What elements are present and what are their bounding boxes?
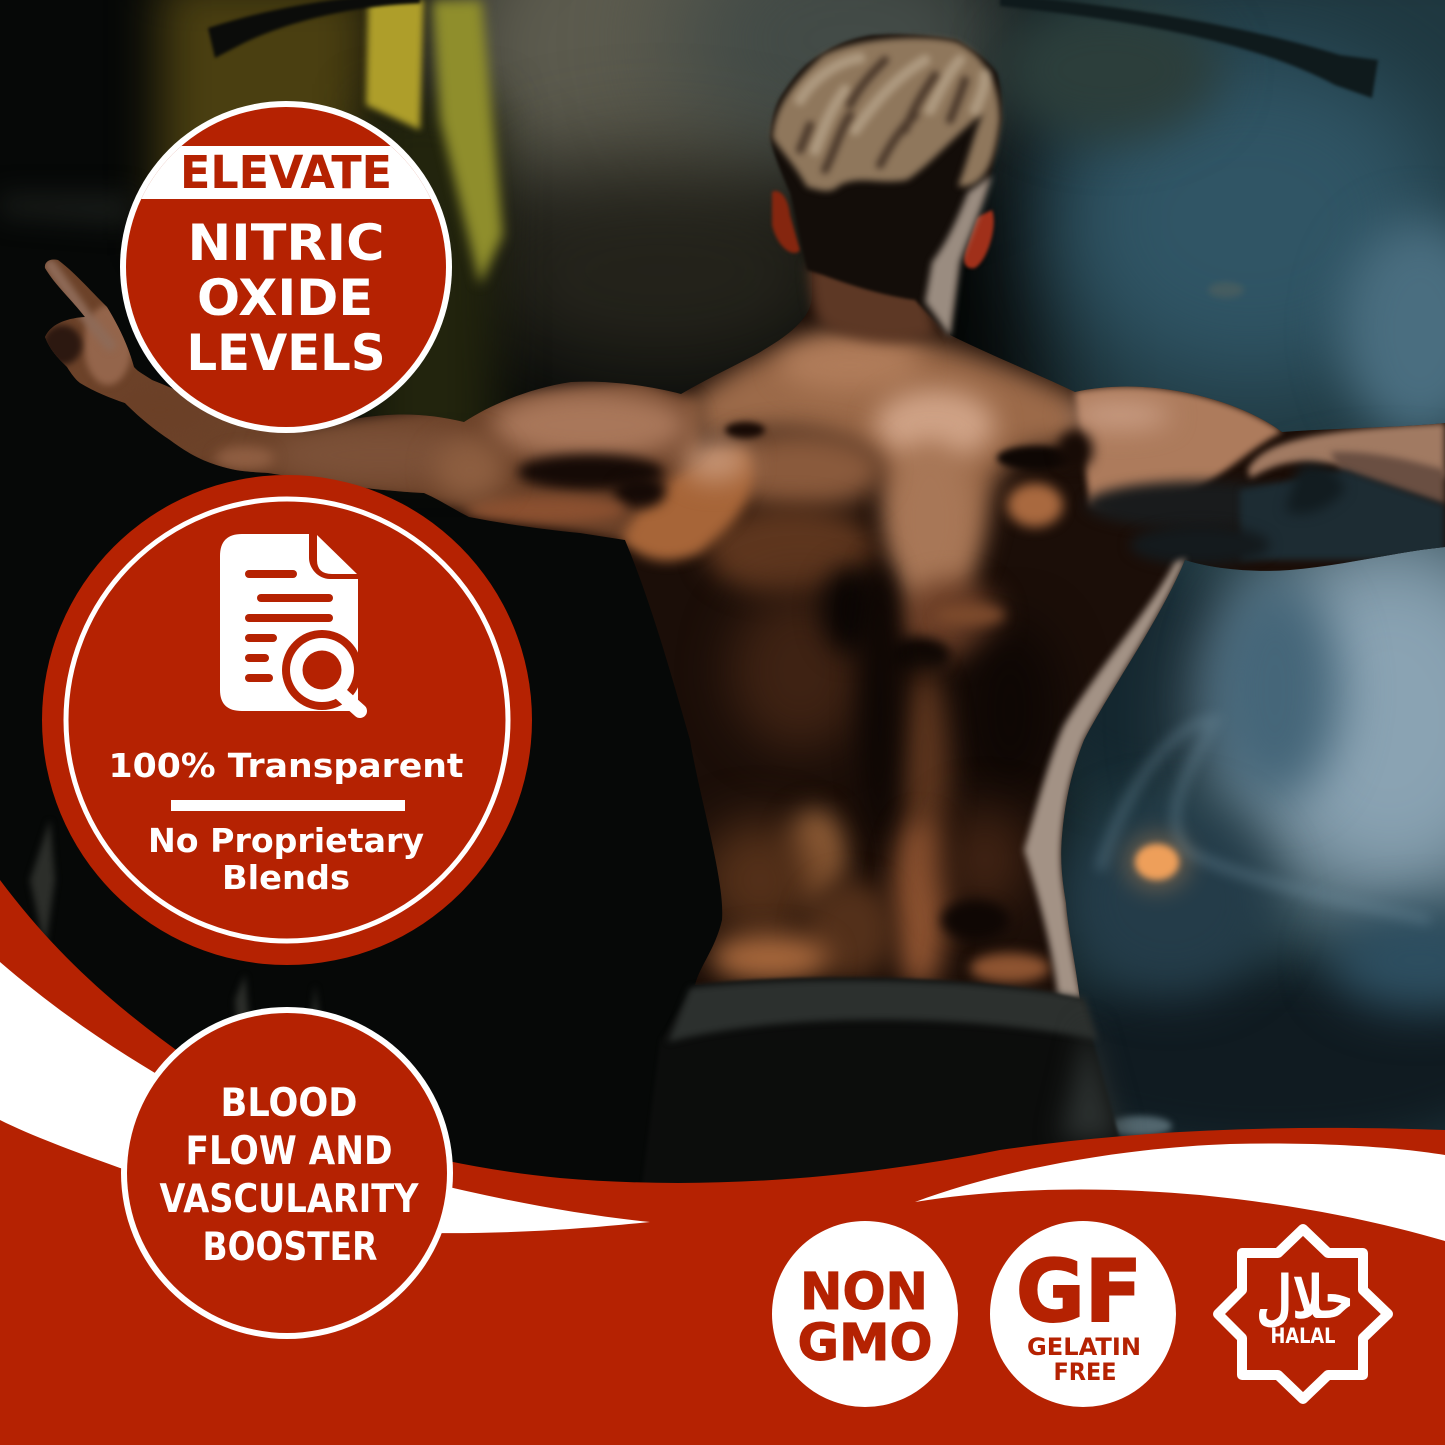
badge: halal star: HALAL <box>1270 1324 1336 1348</box>
man: shorts <box>640 977 1120 1200</box>
photo background tones <box>430 0 1445 1200</box>
white wave: right swoosh <box>915 1143 1445 1241</box>
badge: non gmo: NON <box>800 1263 928 1322</box>
left forearm <box>270 425 490 485</box>
badge: gelatin free: GELATIN <box>1027 1333 1141 1361</box>
man: hair <box>770 34 1002 337</box>
arm base tone <box>0 250 700 550</box>
man: neck <box>808 265 935 342</box>
text: no proprietary blends <box>148 821 424 897</box>
text: no proprietary blends: Blends <box>222 858 350 897</box>
left upper arm <box>490 389 690 461</box>
text: 100% transparent: 100% Transparent <box>108 746 464 785</box>
badge: blood flow and vascularity booster: BLOOD <box>220 1081 358 1126</box>
badge: blood flow and vascularity booster: VASCULARITY <box>160 1177 419 1222</box>
man: torso and arms <box>0 240 1445 1020</box>
red wave background <box>0 880 1445 1445</box>
nitric oxide levels text: LEVELS <box>186 324 386 382</box>
divider bar <box>171 800 405 811</box>
badge: 100% transparent <box>42 475 532 965</box>
white wave: centre tip <box>420 1180 650 1233</box>
badge: elevate nitric oxide levels <box>120 101 452 433</box>
badge: gelatin free: FREE <box>1054 1358 1116 1386</box>
right upper arm <box>1075 387 1282 507</box>
man: ears <box>772 191 994 268</box>
left shoulder blob <box>622 450 752 561</box>
badge: gelatin free <box>990 1221 1176 1407</box>
white wave: left swoosh <box>0 962 170 1180</box>
elevate band: ELEVATE <box>180 146 392 199</box>
nitric oxide levels text <box>186 214 386 382</box>
badge: halal star <box>1218 1229 1388 1399</box>
badge: non gmo <box>772 1221 958 1407</box>
gym machine and yellow panels <box>0 0 1378 1040</box>
nitric oxide levels text: NITRIC <box>188 214 384 272</box>
badge: blood flow and vascularity booster: BOOSTER <box>202 1225 378 1270</box>
right rim light <box>1024 558 1186 1000</box>
text: no proprietary blends: No Proprietary <box>148 821 424 860</box>
badge: non gmo: GMO <box>798 1314 932 1373</box>
badge: halal star: حلال <box>1256 1263 1354 1333</box>
armpit shadows <box>997 446 1073 470</box>
icon: document with magnifier <box>220 534 362 711</box>
nitric oxide levels text: OXIDE <box>197 269 373 327</box>
badge: gelatin free: GF <box>1016 1242 1142 1342</box>
badge: blood flow and vascularity booster: FLOW AND <box>186 1129 392 1174</box>
right forearm <box>1248 423 1445 478</box>
upper back light <box>690 330 1085 640</box>
badge: blood flow and vascularity booster <box>121 1007 453 1339</box>
spine and lower back <box>901 670 949 870</box>
